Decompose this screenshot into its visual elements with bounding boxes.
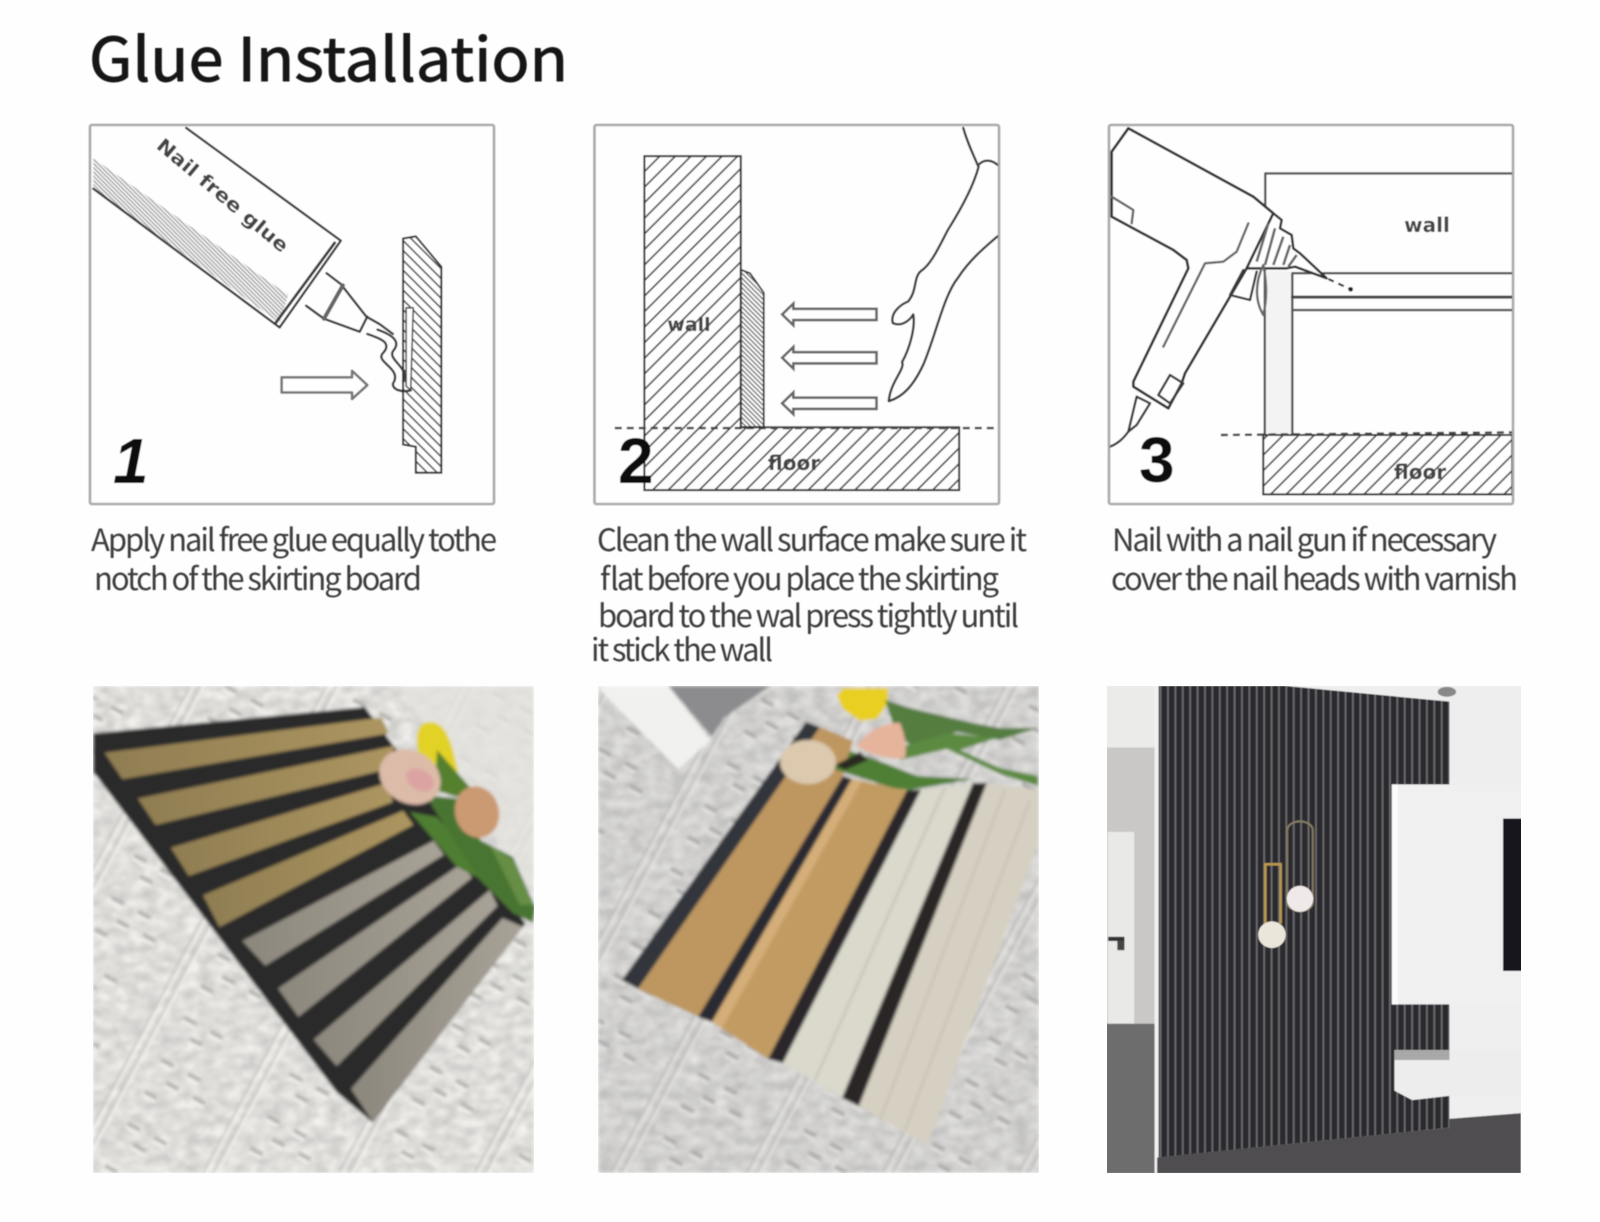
caption: step 2	[591, 515, 1027, 670]
room background	[1106, 686, 1524, 1173]
photo: angled wood slat panel on white cloth	[93, 686, 535, 1173]
panel: step 2 diagram	[594, 125, 999, 504]
title: Glue Installation	[89, 12, 568, 99]
slat wall	[1159, 686, 1449, 1158]
slat panel	[93, 707, 526, 1122]
TV cabinet	[1392, 784, 1526, 1119]
caption: step 1: notch of the skirting board	[94, 554, 422, 599]
icon: nail gun	[1110, 128, 1353, 447]
wall and skirting outline	[1265, 173, 1514, 434]
photo: oak and light slat panel with tulips	[598, 686, 1039, 1173]
caption: step 3	[1111, 515, 1518, 599]
floor	[1157, 1113, 1521, 1173]
caption: step 2: board to the wal press tightly until	[598, 591, 1019, 636]
label: floor: floor	[1394, 460, 1446, 484]
caption: step 2: flat before you place the skirting	[600, 554, 1000, 599]
caption: step 3: cover the nail heads with varnish	[1111, 554, 1518, 599]
skirting board	[741, 270, 764, 427]
pendant lamps	[1258, 821, 1313, 948]
step number 2: 2	[618, 425, 654, 497]
caption: step 1: Apply nail free glue equally tothe	[91, 515, 497, 560]
caption: step 2: it stick the wall	[591, 625, 773, 670]
glue bead	[367, 330, 411, 391]
step number 1: 1	[113, 425, 149, 497]
icon: glue tube	[93, 128, 393, 334]
label: wall: wall	[1404, 213, 1450, 237]
wall and floor hatch	[615, 156, 994, 490]
floor hatch	[1221, 432, 1512, 494]
tulips and leaves	[780, 688, 1038, 790]
step number 3: 3	[1139, 424, 1175, 496]
arrow: press right	[282, 371, 367, 399]
label: nail free glue: Nail free glue	[152, 134, 293, 257]
framed picture corner	[601, 686, 770, 769]
caption: step 2: Clean the wall surface make sure it	[597, 515, 1027, 560]
panel: step 1 diagram	[90, 125, 494, 504]
label: wall: wall	[667, 314, 711, 336]
skirting board profile	[403, 236, 441, 473]
photo: black slat wall interior with pendant lamps	[1106, 686, 1526, 1173]
arrows: press left	[782, 304, 877, 414]
panel: step 3 diagram	[1109, 125, 1514, 504]
tulips	[369, 722, 535, 923]
caption: step 3: Nail with a nail gun if necessary	[1112, 515, 1497, 560]
caption: step 1	[91, 515, 497, 599]
slat panel	[622, 722, 1039, 1145]
icon: hand	[889, 128, 997, 401]
label: floor: floor	[768, 451, 820, 475]
